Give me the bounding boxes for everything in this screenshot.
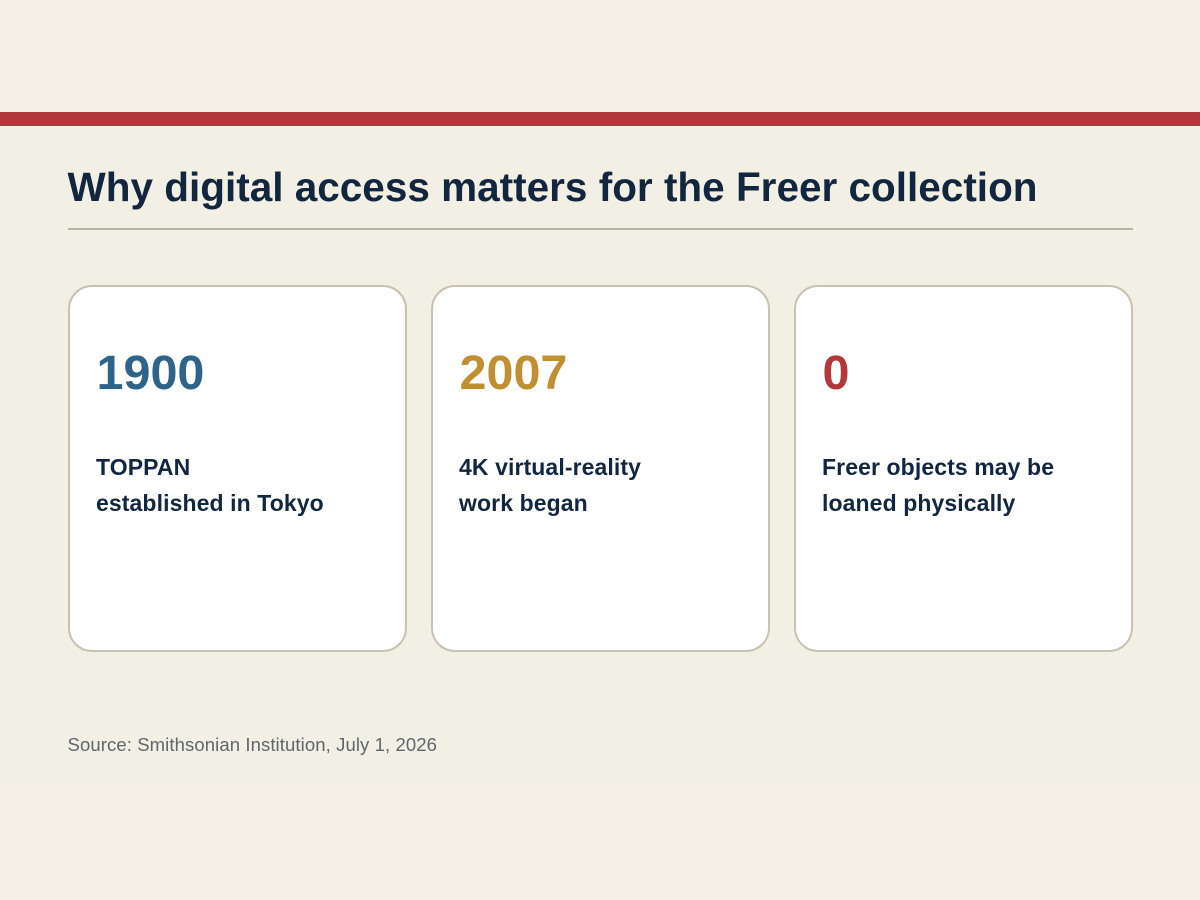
stat label: Freer objects loaned: Freer objects may be — [822, 454, 1054, 480]
content background panel — [0, 126, 1200, 783]
stat label: 4K virtual-reality work: work began — [459, 490, 588, 516]
panel: 2007 stat card — [431, 285, 770, 652]
panel: 1900 stat card — [68, 285, 407, 652]
stat label: TOPPAN established — [96, 454, 324, 516]
stat label: TOPPAN established: established in Tokyo — [96, 490, 324, 516]
stat label: Freer objects loaned: loaned physically — [822, 490, 1015, 516]
source note: Source: Smithsonian Institution, July 1, 2026 — [68, 734, 437, 755]
stat number: 2007: 2007 — [460, 346, 567, 400]
stat label: 4K virtual-reality work: 4K virtual-reality — [459, 454, 641, 480]
stat number: 0: 0 — [822, 346, 849, 400]
stat number: 1900: 1900 — [96, 346, 204, 400]
title: Why digital access matters for the Freer collection — [68, 164, 1038, 210]
panel: 0 stat card — [794, 285, 1133, 652]
stat label: 4K virtual-reality work — [459, 454, 641, 516]
stat label: Freer objects loaned — [822, 454, 1054, 516]
stat label: TOPPAN established: TOPPAN — [96, 454, 190, 480]
top accent bar — [0, 112, 1200, 126]
